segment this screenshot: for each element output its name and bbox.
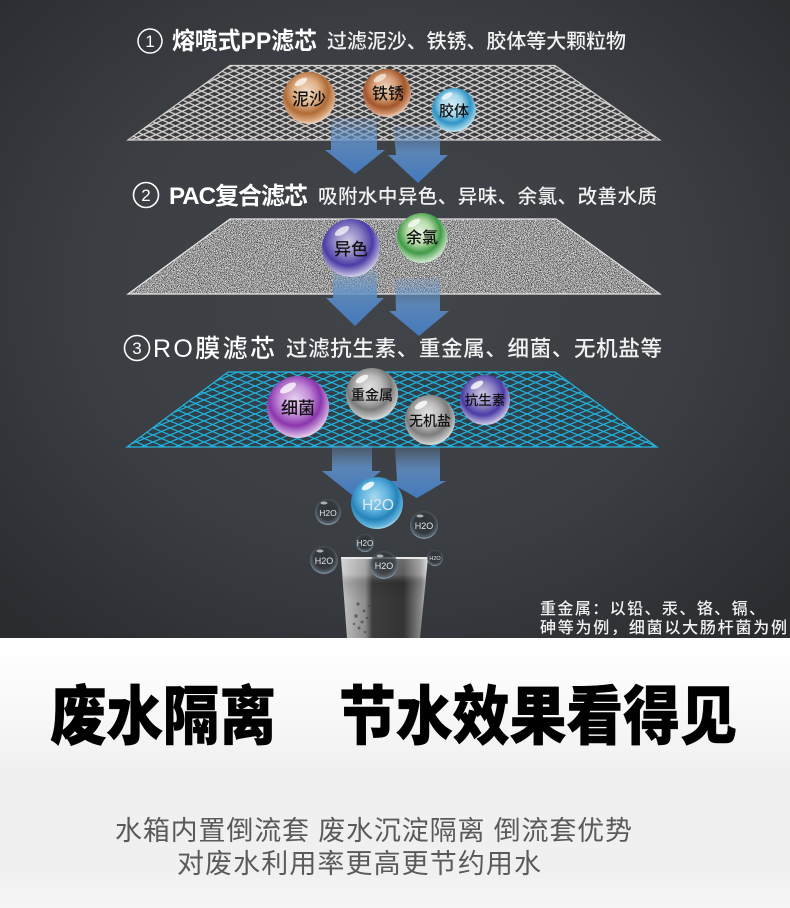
water bubble: small H2O upper left: H2O <box>319 508 337 518</box>
sphere: heavy metals <box>346 368 398 420</box>
sphere: bacteria: 细菌 <box>281 399 315 418</box>
footnote: heavy metal and bacteria note: 重金属：以铅、汞、铬、镉、 <box>540 599 765 618</box>
sphere: iron rust <box>363 69 411 117</box>
sphere: iron rust: 铁锈 <box>372 85 404 103</box>
sphere: inorganic salts: 无机盐 <box>409 413 451 429</box>
heading: step 3 RO membrane filter <box>124 335 662 363</box>
water bubble: small H2O lower left: H2O <box>315 556 333 566</box>
water bubble: tiny H2O right: H2O <box>429 556 441 562</box>
sphere: mud and sand <box>283 72 335 124</box>
sphere: antibiotics <box>460 375 510 425</box>
water bubble: small H2O upper right <box>410 511 438 539</box>
water bubble: small H2O centre: H2O <box>357 539 373 548</box>
headline: wastewater isolation: 废水隔离 <box>50 681 276 753</box>
sphere: heavy metals: 重金属 <box>351 387 393 403</box>
heading: step 2 PAC composite filter <box>134 182 657 210</box>
heading: step 3 RO membrane filter: 过滤抗生素、重金属、细菌、无机盐等 <box>286 337 662 361</box>
arrows: between mesh 2 and mesh 3 <box>326 268 449 336</box>
heading: step 1 melt-blown PP filter: 1 <box>145 32 155 51</box>
body text: backflow sleeve advantages: 对废水利用率更高更节约用水 <box>177 849 541 879</box>
water bubble: small H2O over cup: H2O <box>375 561 393 571</box>
water bubble: small H2O lower left <box>310 546 338 574</box>
headline: wastewater isolation: 节水效果看得见 <box>339 681 737 753</box>
water bubble: small H2O over cup <box>370 551 398 579</box>
filter layer 2: activated carbon granules <box>128 219 660 294</box>
headline: wastewater isolation <box>50 681 737 753</box>
white lower panel <box>0 638 790 908</box>
sphere: off-colour: 异色 <box>334 240 368 259</box>
heading: step 1 melt-blown PP filter: 过滤泥沙、铁锈、胶体等大颗粒物 <box>327 30 626 53</box>
water bubble: small H2O upper right: H2O <box>415 521 433 531</box>
heading: step 2 PAC composite filter: PAC复合滤芯 <box>169 183 308 210</box>
heading: step 2 PAC composite filter: 吸附水中异色、异味、余氯、改善水质 <box>318 186 657 208</box>
sphere: mud and sand: 泥沙 <box>292 90 326 109</box>
water bubble: large H2O: H2O <box>362 497 394 514</box>
sphere: residual chlorine <box>397 213 447 263</box>
water bubble: small H2O centre <box>356 534 374 552</box>
sphere: inorganic salts <box>405 395 455 445</box>
water bubble: small H2O upper left <box>315 499 341 525</box>
filter mesh 1: white PP grid <box>128 66 660 140</box>
sphere: bacteria <box>267 376 329 438</box>
heading: step 3 RO membrane filter: RO膜滤芯 <box>153 335 275 363</box>
heading: step 2 PAC composite filter: 2 <box>141 186 151 205</box>
sphere: off-colour <box>322 219 380 277</box>
sphere: colloid: 胶体 <box>439 103 469 120</box>
icon: cup of purified water <box>341 557 428 638</box>
sphere: residual chlorine: 余氯 <box>406 228 438 247</box>
body text: backflow sleeve advantages: 水箱内置倒流套 废水沉淀隔离 倒流套优势 <box>115 816 632 846</box>
dark background panel <box>0 0 790 638</box>
footnote: heavy metal and bacteria note: 砷等为例，细菌以大肠杆菌为例 <box>540 619 787 637</box>
filter mesh 3: blue RO membrane grid <box>127 372 657 447</box>
heading: step 3 RO membrane filter: 3 <box>132 339 142 358</box>
body text: backflow sleeve advantages <box>115 816 632 879</box>
heading: step 1 melt-blown PP filter <box>138 28 626 55</box>
sphere: antibiotics: 抗生素 <box>465 392 505 408</box>
footnote: heavy metal and bacteria note <box>540 599 787 637</box>
water bubble: tiny H2O right <box>427 550 443 566</box>
arrows: between mesh 1 and mesh 2 <box>325 118 448 183</box>
arrows: between mesh 3 and the clean water <box>322 445 446 498</box>
heading: step 1 melt-blown PP filter: 熔喷式PP滤芯 <box>172 28 317 55</box>
sphere: colloid <box>432 88 476 132</box>
water bubble: large H2O <box>351 477 403 529</box>
